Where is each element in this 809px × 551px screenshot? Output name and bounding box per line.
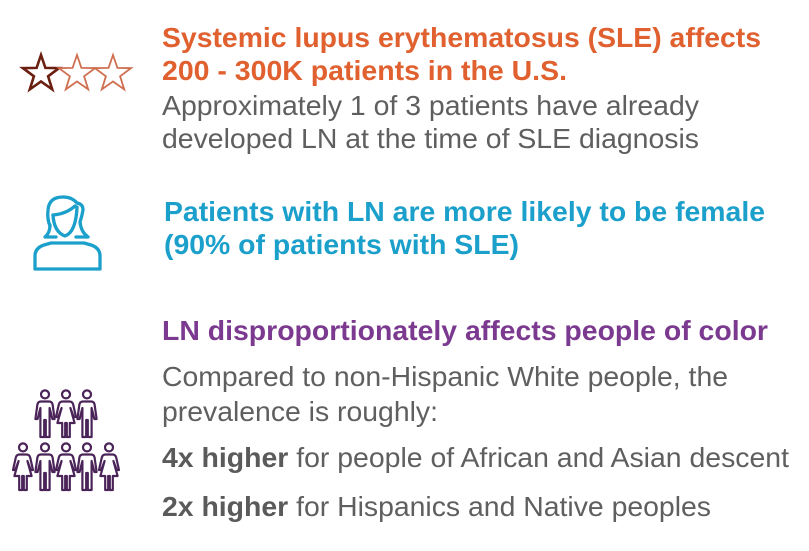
icon: group of people [13, 390, 119, 490]
icon: first dark star [23, 55, 59, 89]
heading: SLE affects patients [162, 22, 761, 86]
heading: SLE affects patients: 200 - 300K patients in the U.S. [162, 55, 567, 86]
heading: patients with LN female: (90% of patients with SLE) [164, 229, 519, 260]
icon: second outline star [59, 55, 95, 89]
body: LN at diagnosis: Approximately 1 of 3 patients have already [162, 90, 699, 121]
icon: female patient [35, 197, 100, 269]
body: prevalence comparison [162, 361, 728, 427]
heading: people of color: LN disproportionately affects people of color [162, 315, 768, 346]
heading: patients with LN female [164, 196, 765, 260]
heading: SLE affects patients: Systemic lupus erythematosus (SLE) affects [162, 22, 761, 53]
stat: 2x higher: 2x higher for Hispanics and Native peoples [162, 491, 711, 522]
text block: SLE prevalence [162, 22, 761, 154]
icon: third outline star [95, 55, 131, 89]
body: prevalence comparison: prevalence is roughly: [162, 396, 438, 427]
heading: patients with LN female: Patients with LN are more likely to be female [164, 196, 765, 227]
body: prevalence comparison: Compared to non-Hispanic White people, the [162, 361, 728, 392]
body: LN at diagnosis: developed LN at the time of SLE diagnosis [162, 123, 699, 154]
body: LN at diagnosis [162, 90, 699, 154]
stat: 4x higher: 4x higher for people of African and Asian descent [162, 442, 789, 473]
icon: three stars rating [23, 55, 131, 89]
